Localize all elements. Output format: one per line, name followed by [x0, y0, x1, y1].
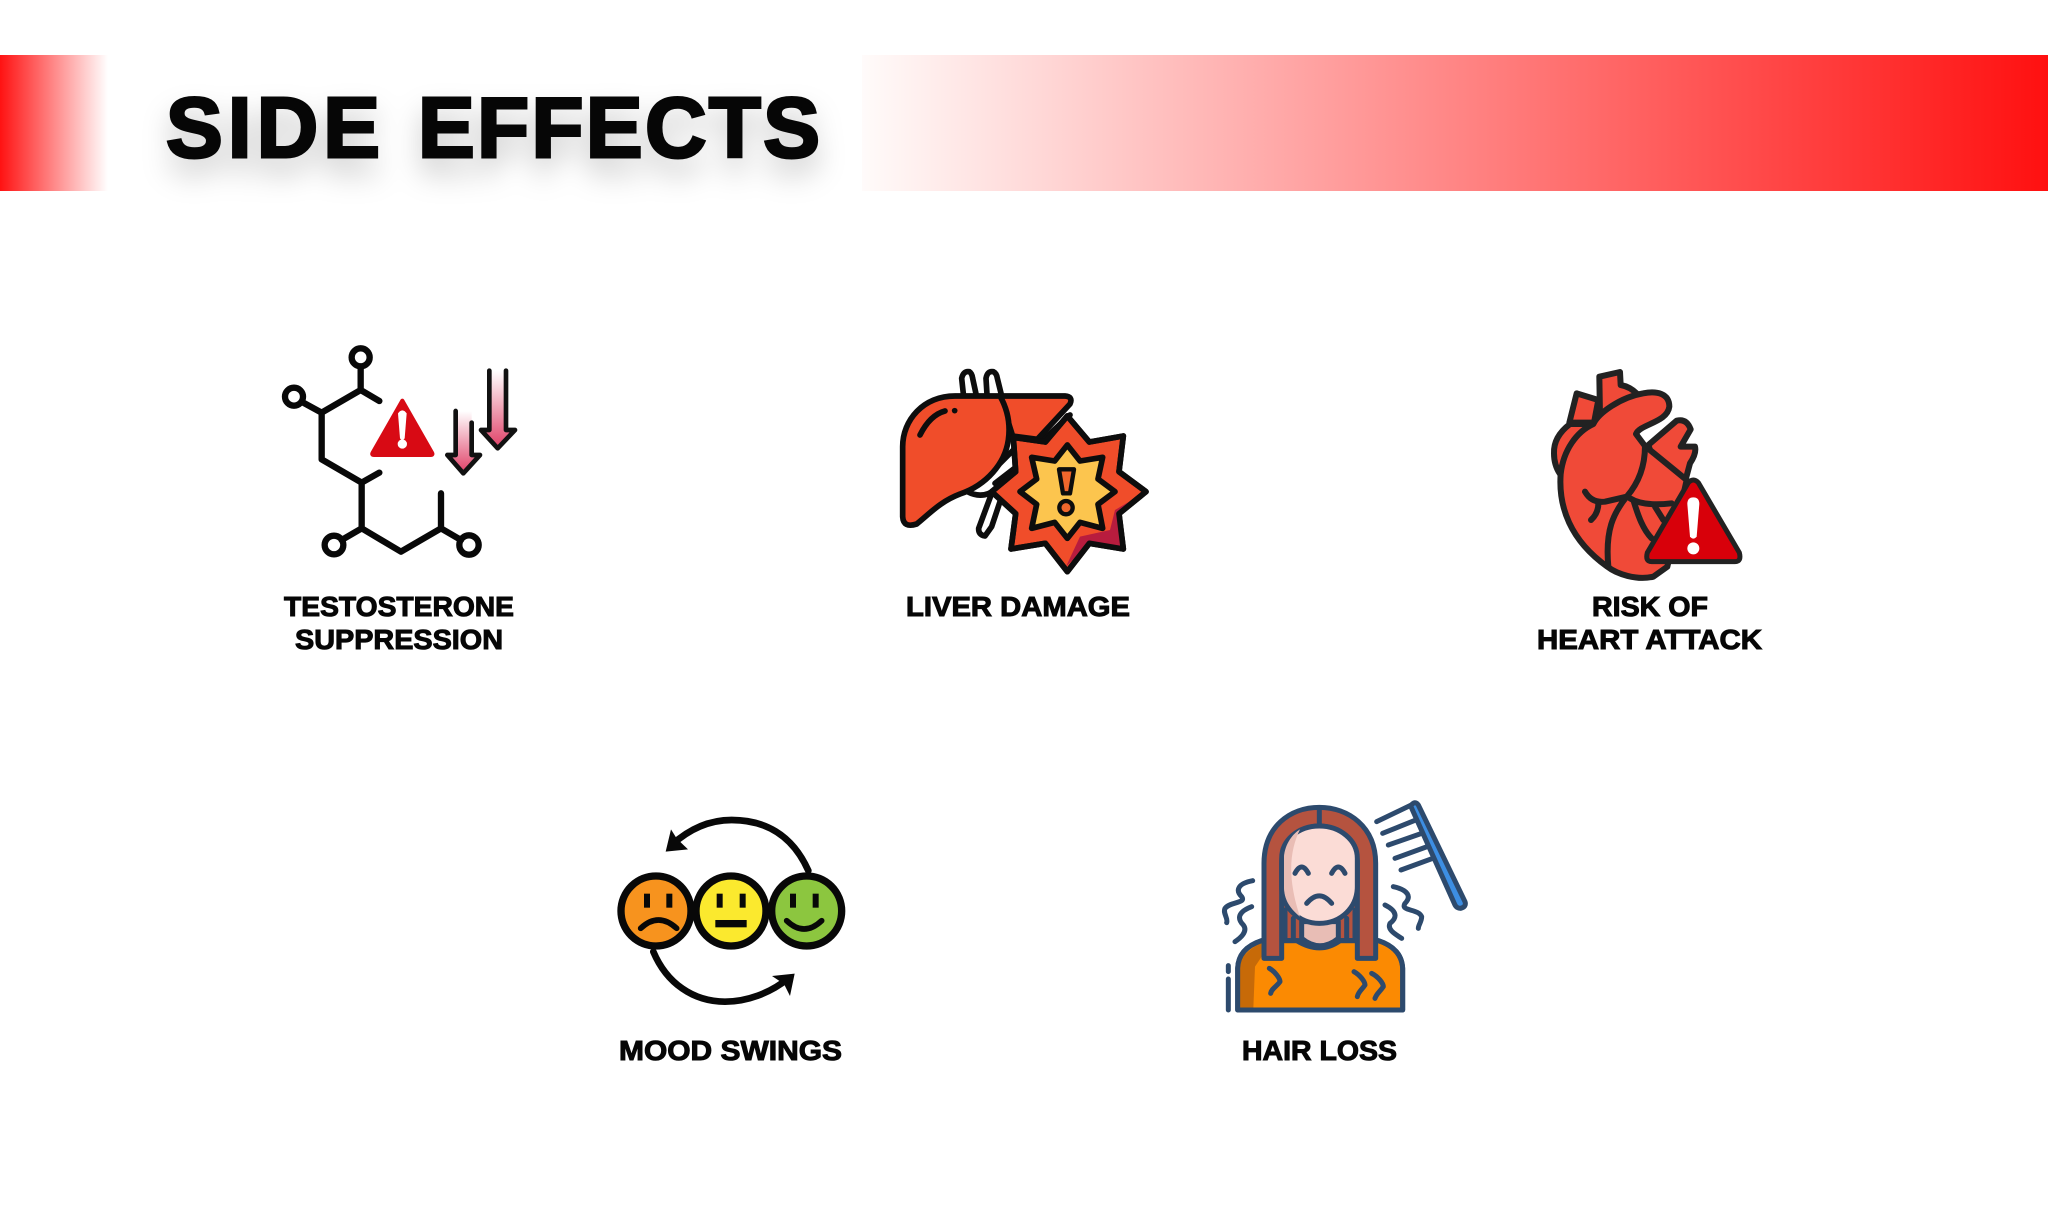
panel: hair loss — [1224, 803, 1465, 1066]
icon: heart with warning triangle — [1554, 372, 1740, 578]
label: HEART ATTACK — [1537, 624, 1762, 655]
icon: woman with hair loss and comb — [1224, 803, 1465, 1010]
panel: liver damage — [903, 372, 1146, 622]
label: RISK OF — [1592, 591, 1708, 622]
icon: liver with burst warning — [903, 372, 1146, 572]
label: HAIR LOSS — [1242, 1035, 1397, 1066]
icon: molecule with warning and down arrows — [285, 348, 515, 555]
panel: mood swings — [619, 820, 842, 1066]
panel: testosterone suppression — [284, 348, 515, 655]
label — [1537, 591, 1762, 655]
title: EFFECTS — [418, 81, 820, 176]
panel: risk of heart attack — [1537, 372, 1762, 655]
label: MOOD SWINGS — [619, 1035, 842, 1066]
title: SIDE — [166, 81, 380, 176]
icon: mood faces and cycle arrows — [621, 820, 842, 1002]
label — [284, 591, 514, 655]
title — [166, 81, 820, 176]
label: LIVER DAMAGE — [906, 591, 1130, 622]
label: SUPPRESSION — [295, 624, 503, 655]
header band: right red gradient — [862, 55, 2048, 191]
header band: left red gradient — [0, 55, 108, 191]
label: TESTOSTERONE — [284, 591, 514, 622]
